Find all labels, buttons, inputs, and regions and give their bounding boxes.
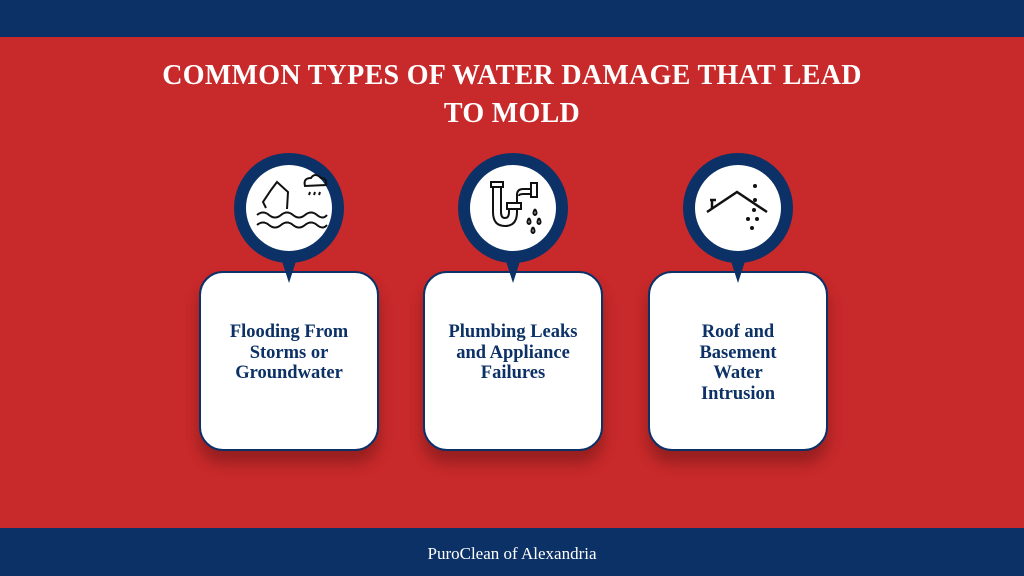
- card: roof: Basement: [699, 342, 777, 362]
- title: [162, 60, 862, 129]
- card: plumbing: and Appliance: [456, 342, 570, 362]
- card: plumbing: [423, 271, 603, 451]
- card: flooding: Groundwater: [235, 363, 343, 383]
- title: TO MOLD: [444, 98, 580, 129]
- footer bar: [0, 528, 1024, 576]
- card: flooding: [199, 271, 379, 451]
- icon pin: roof: [683, 153, 793, 283]
- icon pin: flood: [234, 153, 344, 283]
- card: flooding: Storms or: [250, 342, 328, 362]
- card: roof: Intrusion: [701, 384, 775, 404]
- card: plumbing: Plumbing Leaks: [448, 322, 578, 342]
- icon pin: pipe: [458, 153, 568, 283]
- footer text: PuroClean of Alexandria: [427, 544, 596, 563]
- card: roof: Roof and: [702, 322, 774, 342]
- card: plumbing: Failures: [481, 363, 545, 383]
- card: roof: [648, 271, 828, 451]
- card: flooding: Flooding From: [230, 322, 348, 342]
- card: roof: Water: [713, 363, 763, 383]
- title: COMMON TYPES OF WATER DAMAGE THAT LEAD: [162, 60, 862, 91]
- header bar: [0, 0, 1024, 37]
